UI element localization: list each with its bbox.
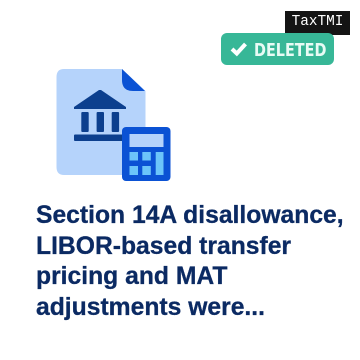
heading: Section 14A disallowance,	[36, 201, 344, 229]
watermark: TaxTMI: TaxTMI	[292, 14, 343, 30]
folded corner	[122, 69, 145, 91]
heading: pricing and MAT	[36, 262, 227, 290]
heading: LIBOR-based transfer	[36, 232, 291, 260]
bank building	[74, 90, 126, 141]
document page	[56, 69, 146, 175]
heading: adjustments were...	[36, 293, 265, 321]
badge: deleted	[221, 33, 334, 65]
badge label: DELETED	[254, 40, 326, 61]
icon: document with bank and calculator	[56, 69, 170, 181]
icon: check mark	[230, 42, 247, 56]
calculator	[122, 127, 170, 181]
watermark: TaxTMI	[285, 11, 350, 35]
